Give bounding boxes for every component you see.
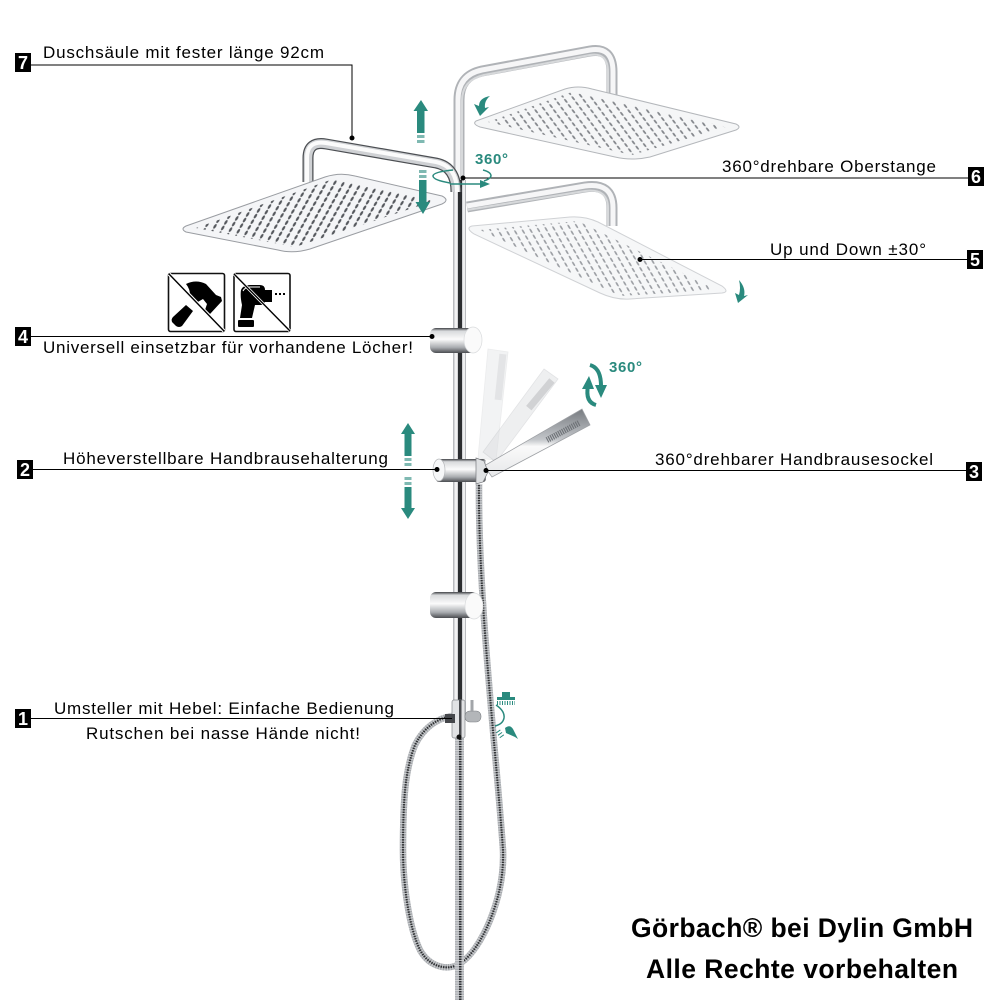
rotation arrow: lower head tilt	[735, 280, 748, 303]
label 1 line 1: Umsteller mit Hebel: Einfache Bedienung	[54, 699, 394, 718]
label 3: 360°drehbarer Handbrausesockel	[655, 450, 933, 469]
label 2: Höheverstellbare Handbrausehalterung	[63, 449, 388, 468]
label: 360 degrees hand shower: 360°	[609, 359, 642, 376]
lower hose to bottom edge	[455, 735, 464, 1000]
label 6: 360°drehbare Oberstange	[722, 157, 936, 176]
arrow: shower arm down	[416, 170, 430, 214]
main rail	[453, 180, 466, 720]
rotation ring: 360 degrees at top of rail	[433, 170, 491, 188]
leader dot 6	[460, 176, 466, 180]
badge 1: 1	[18, 709, 28, 729]
icon: no hammer	[168, 274, 224, 332]
badge 3	[966, 462, 982, 482]
copyright line 2: Alle Rechte vorbehalten	[646, 954, 958, 984]
badge 1	[15, 709, 31, 729]
badge 2	[17, 460, 33, 480]
label 1 line 2: Rutschen bei nasse Hände nicht!	[86, 724, 360, 743]
rotation arrow: upper head tilt	[474, 96, 490, 116]
label 4: Universell einsetzbar für vorhandene Löcher!	[43, 338, 413, 357]
shower head: left position	[183, 174, 446, 252]
badge 7	[15, 53, 31, 73]
arrow: holder down	[401, 477, 415, 519]
back pipe: lower arm position	[467, 185, 613, 226]
leader dot 2	[434, 467, 440, 472]
leader line 6	[462, 177, 968, 179]
shower hose	[403, 484, 503, 967]
hand shower: front position	[484, 409, 590, 477]
badge 3: 3	[969, 462, 979, 482]
leader line 7	[31, 65, 352, 138]
front pipe: left arm	[307, 143, 457, 192]
arrow: holder up	[401, 423, 415, 466]
icon: no drill	[234, 274, 290, 332]
wall bracket: middle adjustable holder	[433, 458, 488, 484]
hand shower: upright faded position	[478, 349, 508, 460]
shower head: upper position	[475, 87, 739, 159]
back pipe: upper arm position	[458, 49, 613, 190]
badge 2: 2	[20, 460, 30, 480]
badge 5	[967, 250, 983, 270]
wall bracket: lower	[430, 592, 483, 619]
badge 4: 4	[18, 327, 28, 347]
leader line 1	[31, 718, 452, 720]
hand shower: diagonal faded position	[483, 369, 558, 462]
leader line 3	[486, 470, 966, 472]
leader line 4	[31, 336, 432, 338]
copyright line 1: Görbach® bei Dylin GmbH	[631, 913, 973, 943]
badge 5: 5	[970, 250, 980, 270]
arrow: shower arm up	[414, 100, 428, 143]
label 5: Up und Down ±30°	[770, 240, 926, 259]
badge 7: 7	[18, 53, 28, 73]
leader dot 5	[638, 257, 642, 262]
wall bracket: upper	[430, 327, 482, 353]
leader dot 3	[484, 468, 488, 473]
label: 360 degrees rail: 360°	[475, 151, 508, 168]
badge 6	[968, 167, 984, 187]
icon: diverter modes	[495, 692, 518, 739]
label 7: Duschsäule mit fester länge 92cm	[43, 43, 324, 62]
leader dot 4	[430, 334, 434, 339]
badge 4	[15, 327, 31, 347]
diverter valve with lever	[445, 700, 481, 740]
shower head: lower position	[469, 217, 726, 299]
leader dot 7	[350, 136, 354, 140]
leader line 5	[640, 258, 967, 260]
badge 6: 6	[971, 167, 981, 187]
leader line 2	[33, 468, 437, 470]
rotation arrows: hand shower	[582, 365, 607, 405]
